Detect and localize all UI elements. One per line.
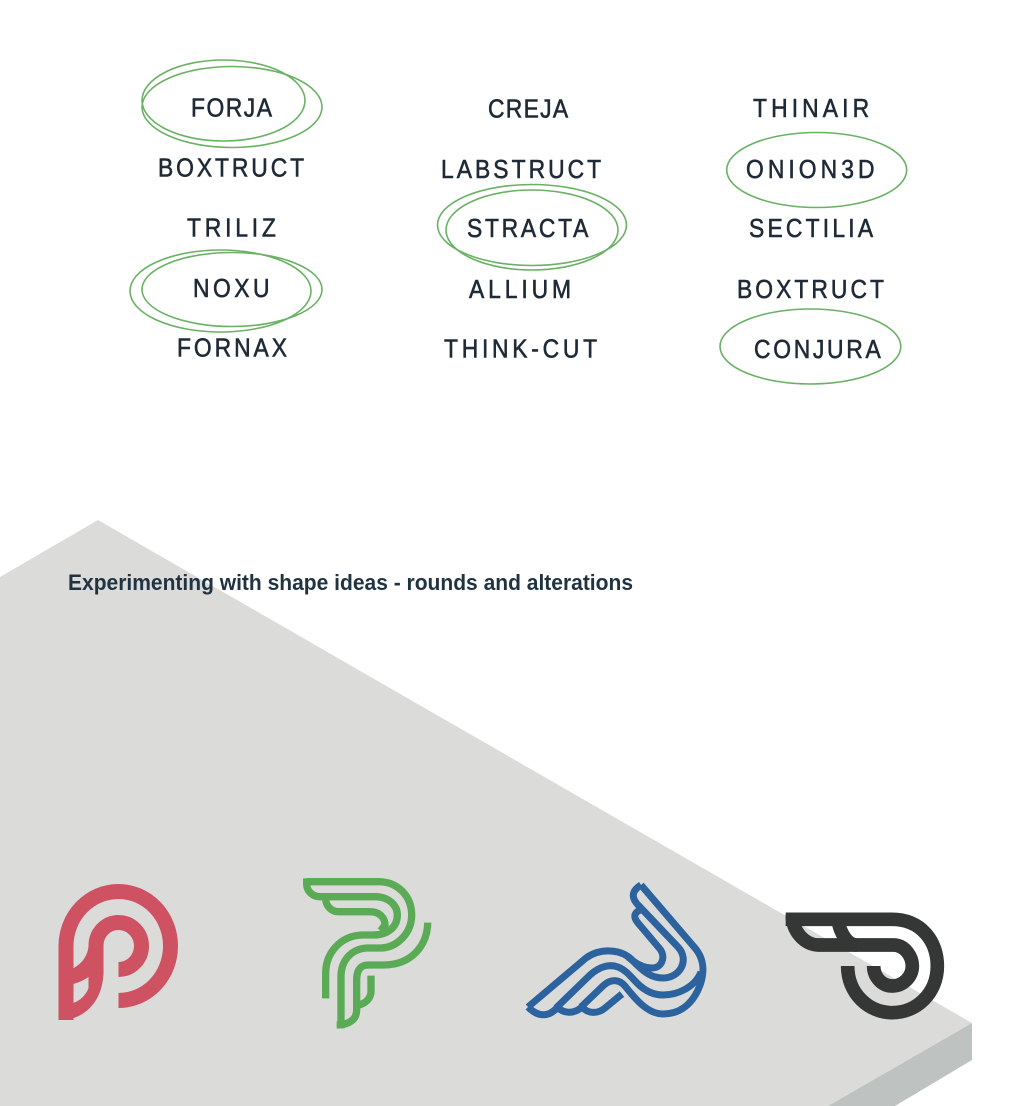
name list: column two: CREJA xyxy=(488,95,569,124)
name list: column one: TRILIZ xyxy=(187,214,276,243)
name list: column three: CONJURA xyxy=(754,336,881,364)
name list: column two: LABSTRUCT xyxy=(441,156,601,184)
hand-drawn circles around chosen names xyxy=(130,60,907,384)
name list: column one: BOXTRUCT xyxy=(158,154,304,183)
name list: column two: THINK-CUT xyxy=(444,335,597,364)
name list: column three: SECTILIA xyxy=(749,215,874,243)
name list: column two: STRACTA xyxy=(467,215,589,243)
logo: black wing xyxy=(786,915,937,1013)
name list: column three: BOXTRUCT xyxy=(737,276,884,304)
name list: column two xyxy=(441,95,601,364)
isometric grey platform xyxy=(0,520,972,1106)
name list: column one: FORJA xyxy=(191,94,273,123)
logo: green P xyxy=(307,878,428,1028)
name list: column three: THINAIR xyxy=(753,95,869,123)
logo: red P xyxy=(58,892,170,1020)
heading: Experimenting with shape ideas - rounds and alterations xyxy=(68,570,633,595)
name list: column three: ONION3D xyxy=(746,156,874,184)
logo: blue wing xyxy=(528,885,703,1015)
name list: column three xyxy=(737,95,884,364)
name list: column one xyxy=(158,94,304,363)
name list: column two: ALLIUM xyxy=(469,276,571,304)
name list: column one: FORNAX xyxy=(177,334,287,363)
name list: column one: NOXU xyxy=(193,275,270,303)
